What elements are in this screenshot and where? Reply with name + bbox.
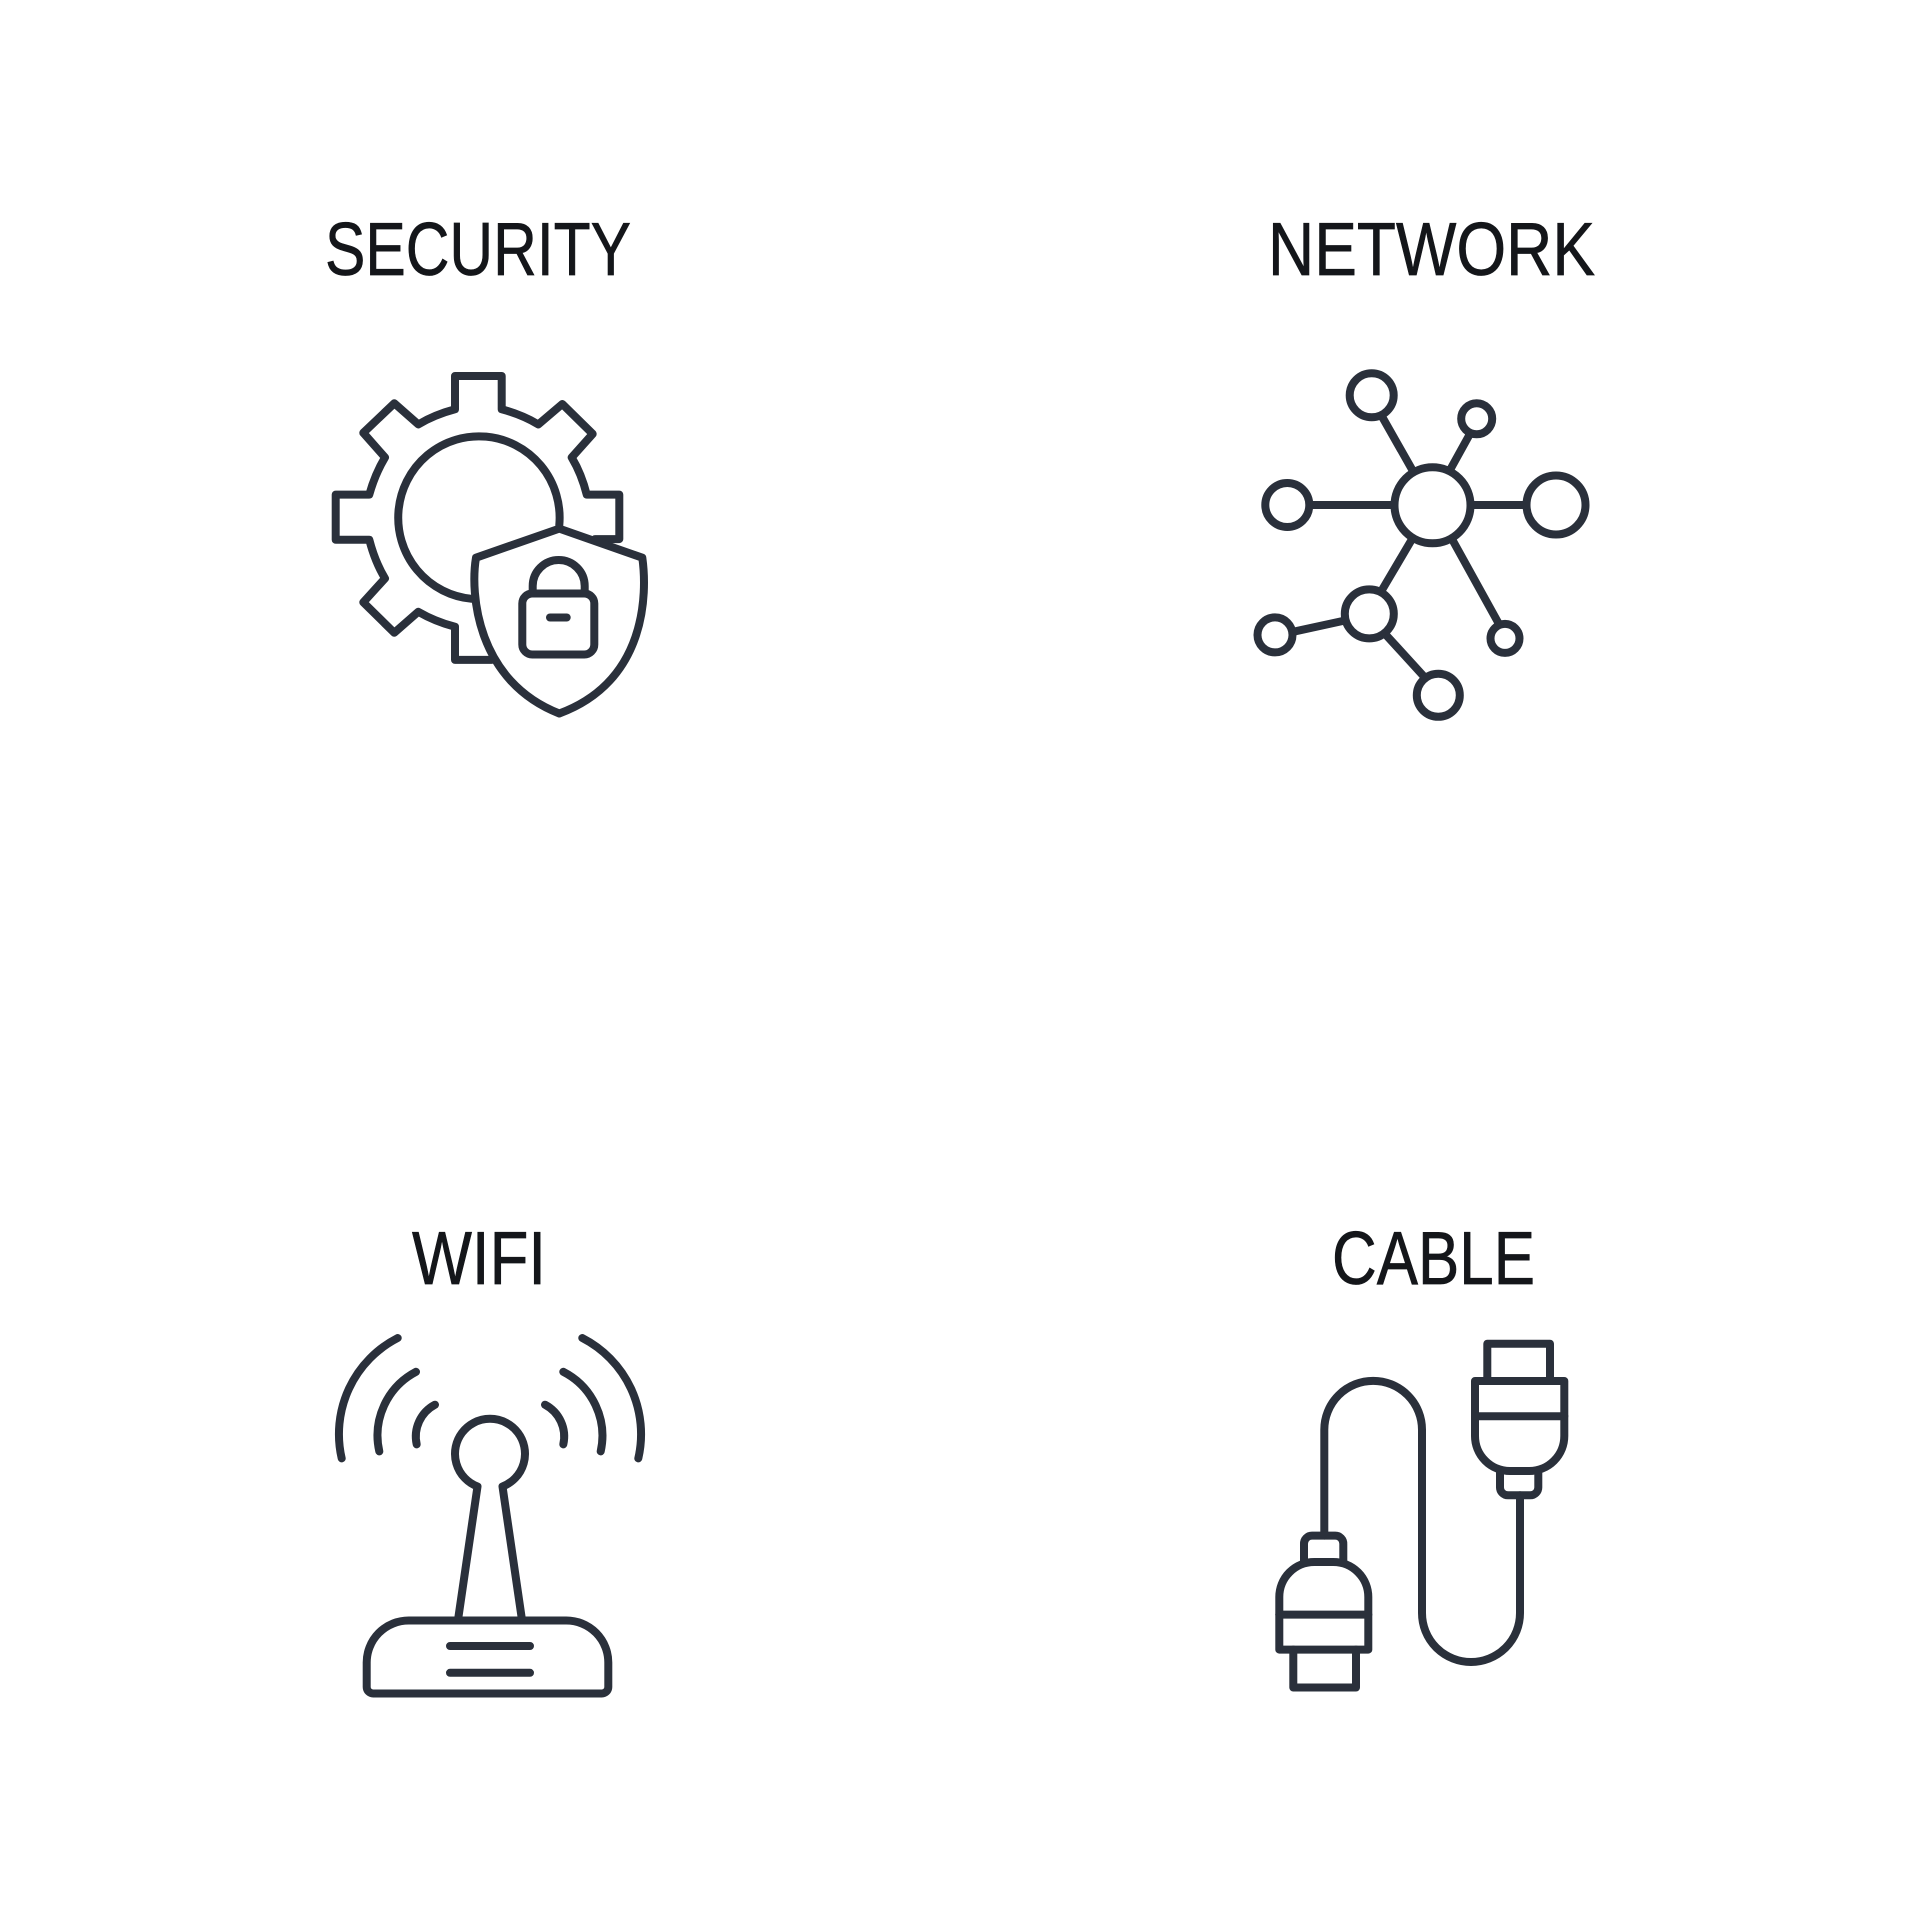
panel: cable	[1279, 1216, 1564, 1688]
icon: wifi router	[339, 1338, 641, 1694]
heading: security: SECURITY	[325, 207, 631, 291]
icon: network nodes	[1258, 373, 1586, 717]
heading: network: NETWORK	[1268, 207, 1595, 291]
panel: wifi	[339, 1216, 641, 1694]
icon: cable with two plugs	[1279, 1344, 1564, 1688]
icon: gear with shield and lock	[336, 376, 644, 714]
panel: security	[325, 207, 644, 714]
heading: wifi: WIFI	[412, 1216, 546, 1300]
panel: network	[1258, 207, 1595, 717]
heading: cable: CABLE	[1332, 1216, 1535, 1300]
